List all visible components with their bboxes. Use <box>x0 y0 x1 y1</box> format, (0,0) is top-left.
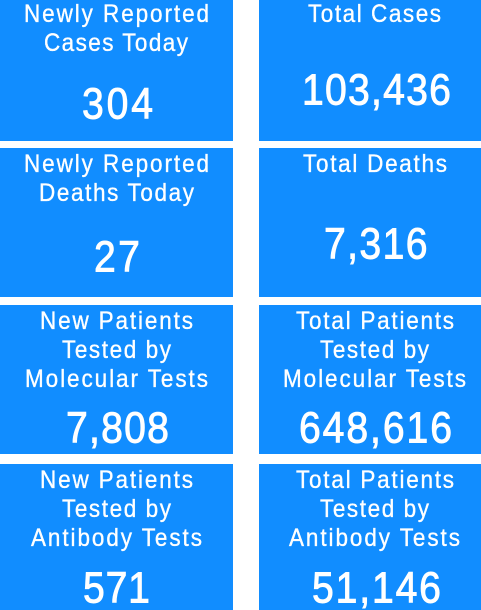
label: total patients tested by molecular tests: Molecular Tests <box>283 365 466 393</box>
panel: newly reported cases today <box>0 0 233 141</box>
label: newly reported deaths today: Newly Reported <box>24 150 209 178</box>
label: new patients tested by antibody tests: New Patients <box>40 466 193 494</box>
value: 304: 304 <box>82 80 153 128</box>
label: total patients tested by molecular tests: Tested by <box>320 336 429 364</box>
value: 648,616: 648,616 <box>299 404 452 452</box>
panel: total deaths <box>259 148 481 297</box>
label: new patients tested by antibody tests <box>31 466 202 552</box>
label: total deaths: Total Deaths <box>303 150 447 178</box>
label: total patients tested by antibody tests: Total Patients <box>296 466 454 494</box>
panel: newly reported deaths today <box>0 148 233 297</box>
label: total patients tested by antibody tests: Tested by <box>320 495 429 523</box>
label: newly reported cases today: Newly Reported <box>24 0 209 28</box>
panel: total patients tested by molecular tests <box>259 305 481 454</box>
value: 7,808: 7,808 <box>66 404 169 452</box>
label: newly reported cases today <box>24 0 209 57</box>
panel: total patients tested by antibody tests <box>259 464 481 610</box>
label: new patients tested by molecular tests <box>25 307 208 393</box>
value: 27: 27 <box>94 233 140 281</box>
label: new patients tested by antibody tests: Antibody Tests <box>31 524 202 552</box>
label: new patients tested by molecular tests: Tested by <box>62 336 171 364</box>
label: new patients tested by molecular tests: New Patients <box>40 307 193 335</box>
label: new patients tested by molecular tests: Molecular Tests <box>25 365 208 393</box>
label: total patients tested by molecular tests: Total Patients <box>296 307 454 335</box>
label: new patients tested by antibody tests: Tested by <box>62 495 171 523</box>
label: total cases: Total Cases <box>308 0 441 28</box>
label: total patients tested by molecular tests <box>283 307 466 393</box>
panel: total cases <box>259 0 481 141</box>
label: newly reported deaths today: Deaths Today <box>39 179 194 207</box>
label: total patients tested by antibody tests <box>289 466 460 552</box>
value: 103,436: 103,436 <box>302 66 451 114</box>
panel: new patients tested by antibody tests <box>0 464 233 610</box>
label: total patients tested by antibody tests: Antibody Tests <box>289 524 460 552</box>
label: newly reported deaths today <box>24 150 209 207</box>
label: newly reported cases today: Cases Today <box>44 29 188 57</box>
panel: new patients tested by molecular tests <box>0 305 233 454</box>
value: 7,316: 7,316 <box>324 220 428 268</box>
